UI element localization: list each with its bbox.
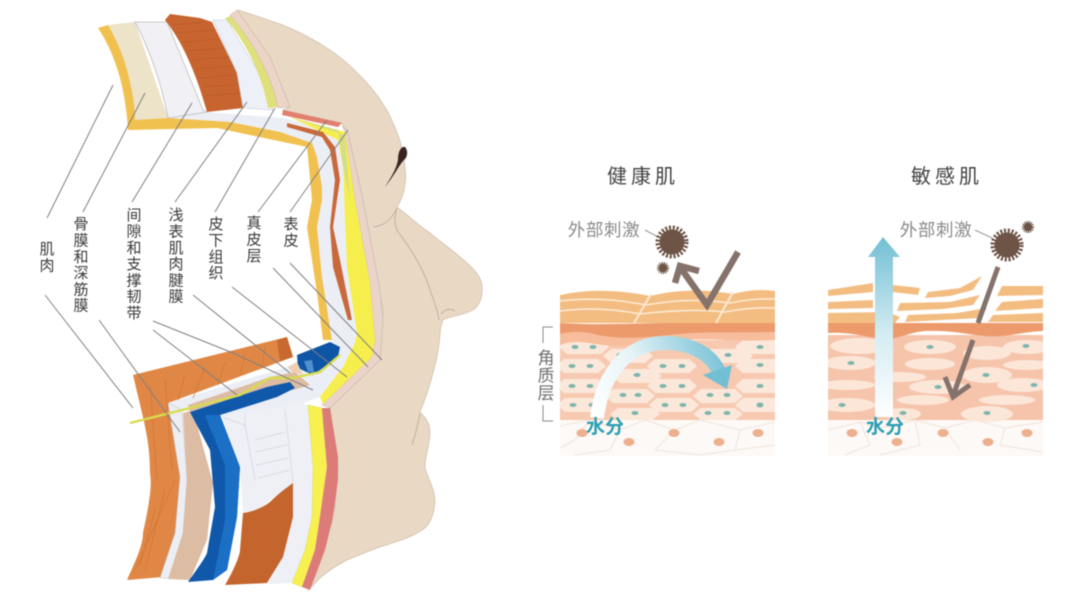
white vertical strip <box>160 403 187 578</box>
reflected irritant arrow <box>675 252 738 305</box>
label: 表皮: 表皮 <box>282 216 298 249</box>
stimulus label: 外部刺激 <box>900 220 972 240</box>
lower muscle block <box>225 483 293 585</box>
face skin silhouette <box>237 10 482 590</box>
orange basal nuclei <box>846 429 1032 446</box>
blue SMAS upper <box>297 342 340 375</box>
heading: 敏感肌: 敏感肌 <box>911 165 983 188</box>
basal hex lines <box>560 420 775 455</box>
moisture label: 水分 <box>586 416 624 438</box>
orange basal nuclei <box>576 429 764 446</box>
label: 皮下组织: 皮下组织 <box>206 216 224 281</box>
moisture arc arrow <box>597 343 732 418</box>
dermis top <box>230 10 290 108</box>
dermis middle layer <box>322 125 383 408</box>
white support layer <box>135 22 207 118</box>
white panel lower <box>222 403 316 584</box>
bracket: stratum label <box>534 327 554 421</box>
basal white layer <box>828 420 1043 456</box>
heading: 健康肌: 健康肌 <box>607 165 679 188</box>
fine white sublayer <box>213 20 273 110</box>
pointer line <box>975 230 992 238</box>
stratum corneum plates <box>560 290 775 323</box>
label: 间隙和支撑韧带: 间隙和支撑韧带 <box>124 207 142 321</box>
label: 骨膜和深筋膜: 骨膜和深筋膜 <box>72 216 88 314</box>
moisture label: 水分 <box>866 416 904 438</box>
icon: eyebrow <box>385 147 407 187</box>
deep cell base <box>560 340 775 424</box>
white connective layer <box>135 112 357 417</box>
leader lines <box>45 85 382 432</box>
label: 浅表肌肉腱膜: 浅表肌肉腱膜 <box>166 207 184 305</box>
muscle top block <box>165 14 243 112</box>
blue light band <box>205 415 240 580</box>
muscle fibres <box>172 22 241 96</box>
pointer line <box>645 230 658 237</box>
red epidermis strip <box>282 110 342 127</box>
teal nuclei <box>838 344 1038 415</box>
nerve <box>130 355 340 423</box>
beige periosteum layer <box>108 22 168 120</box>
basal white layer <box>560 420 775 456</box>
beige vertical layer <box>168 410 213 580</box>
fat middle layer <box>290 117 375 404</box>
bracket: stratum label: 角质层 <box>534 349 554 402</box>
panel: healthy skin <box>534 165 785 456</box>
beige small fat <box>288 362 303 375</box>
light sub-band <box>560 331 775 346</box>
skin cross-section <box>556 290 785 456</box>
orange deep strip <box>287 123 352 320</box>
plate dividers <box>634 292 733 323</box>
cells <box>556 340 785 420</box>
icon: large irritant particle <box>658 228 686 256</box>
fat lower <box>292 405 327 587</box>
blue highlight <box>304 360 314 372</box>
label: 真皮层: 真皮层 <box>244 214 262 264</box>
penetrating irritant arrow <box>945 267 998 397</box>
upper layers <box>98 10 383 417</box>
beige horizontal layer <box>188 372 310 412</box>
dark band <box>560 322 775 338</box>
red epidermis lower <box>302 408 338 590</box>
fat layer top <box>225 15 278 108</box>
muscle end shade <box>277 337 293 361</box>
muscle fibres lower <box>135 347 265 570</box>
teal nuclei <box>568 345 764 415</box>
panel: facial anatomy cross-section <box>38 10 482 590</box>
golden muscle fascia band <box>98 25 332 340</box>
broken stratum plates <box>828 276 1043 323</box>
stimulus label: 外部刺激 <box>568 220 640 240</box>
basal hex lines <box>828 420 1043 455</box>
face contour lines <box>373 208 455 445</box>
icon: small irritant particle <box>658 263 668 273</box>
panel: sensitive skin <box>819 165 1051 456</box>
deep cell base <box>828 335 1043 423</box>
dark band <box>828 323 1043 339</box>
skin cross-section <box>819 276 1051 456</box>
icon: large irritant particle <box>993 231 1021 259</box>
ligament lines <box>222 410 293 483</box>
lower layers <box>127 337 340 590</box>
icon: small irritant particle <box>1023 222 1033 232</box>
large muscle block <box>127 337 293 580</box>
plate gaps <box>560 299 775 314</box>
label: 肌肉: 肌肉 <box>38 241 54 274</box>
moisture escape arrow <box>868 237 900 417</box>
cells <box>819 338 1051 422</box>
blue SMAS lower <box>188 382 295 582</box>
